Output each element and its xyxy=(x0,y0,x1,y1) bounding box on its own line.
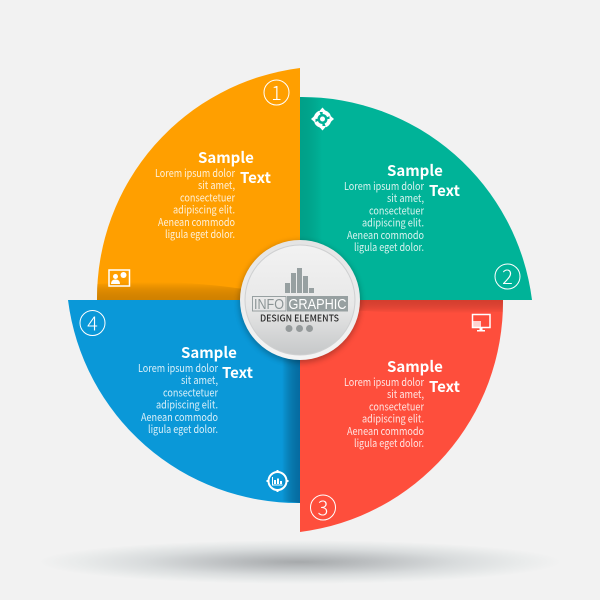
body text 2: Aenean commodo xyxy=(347,228,424,243)
body text 4: sit amet, xyxy=(181,373,218,388)
heading: sample text 1: Text xyxy=(240,167,272,188)
body text 3: adipiscing elit. xyxy=(362,412,424,426)
infographic label xyxy=(252,296,348,313)
body text 1 xyxy=(155,166,236,242)
body text 2: consectetuer xyxy=(369,204,425,218)
panel: 1 orange xyxy=(97,68,300,300)
icon: presentation xyxy=(109,270,130,286)
heading: sample text 1 xyxy=(198,147,272,188)
number 4: 4 xyxy=(87,308,98,336)
icon: bar chart xyxy=(285,268,314,293)
heading: sample text 3: Text xyxy=(429,376,461,397)
panel: 3 red xyxy=(300,300,503,532)
body text 1: ligula eget dolor. xyxy=(165,227,235,242)
body text 4 xyxy=(138,361,219,437)
body text 2 xyxy=(344,179,425,255)
body text 4: Lorem ipsum dolor xyxy=(138,361,219,376)
center badge xyxy=(239,240,361,363)
body text 3: sit amet, xyxy=(387,387,424,402)
heading: sample text 4 xyxy=(181,342,254,383)
heading: sample text 4: Sample xyxy=(181,342,237,363)
number 1 xyxy=(264,77,289,106)
body text 1: Lorem ipsum dolor xyxy=(155,166,236,181)
body text 1: adipiscing elit. xyxy=(173,202,235,218)
icon: cycle xyxy=(311,108,334,130)
body text 1: Aenean commodo xyxy=(158,215,235,230)
design elements label: DESIGN ELEMENTS xyxy=(260,310,339,324)
body text 4: adipiscing elit. xyxy=(156,398,218,412)
number 2 xyxy=(495,261,520,290)
three dots xyxy=(286,325,313,332)
heading: sample text 3 xyxy=(387,356,461,397)
body text 1: sit amet, xyxy=(198,178,235,193)
body text 4: Aenean commodo xyxy=(141,410,218,425)
heading: sample text 3: Sample xyxy=(387,356,443,377)
infographic label: INFO xyxy=(254,297,284,313)
body text 4: ligula eget dolor. xyxy=(148,422,218,437)
panel: 2 teal xyxy=(300,97,532,300)
panel: 4 blue xyxy=(68,300,300,503)
body text 3: ligula eget dolor. xyxy=(354,436,424,451)
icon: chart ring xyxy=(266,470,288,492)
body text 4: consectetuer xyxy=(163,386,219,400)
number 3 xyxy=(310,492,336,521)
icon: monitor xyxy=(472,314,490,332)
number 1: 1 xyxy=(271,77,282,106)
body text 2: ligula eget dolor. xyxy=(354,240,424,255)
body text 3: Aenean commodo xyxy=(347,424,424,439)
heading: sample text 4: Text xyxy=(222,362,254,383)
floor shadow xyxy=(38,540,562,584)
body text 3: consectetuer xyxy=(369,400,425,414)
body text 2: sit amet, xyxy=(387,191,424,206)
heading: sample text 1: Sample xyxy=(198,147,254,168)
infographic label: GRAPHIC xyxy=(288,297,346,313)
number 2: 2 xyxy=(502,261,513,290)
heading: sample text 2: Text xyxy=(429,180,461,201)
body text 2: Lorem ipsum dolor xyxy=(344,179,425,194)
heading: sample text 2 xyxy=(387,160,461,201)
body text 2: adipiscing elit. xyxy=(362,216,424,230)
number 3: 3 xyxy=(318,492,328,521)
body text 1: consectetuer xyxy=(180,190,236,206)
body text 3: Lorem ipsum dolor xyxy=(344,375,425,390)
body text 3 xyxy=(344,375,425,451)
number 4 xyxy=(80,308,105,336)
heading: sample text 2: Sample xyxy=(387,160,443,181)
